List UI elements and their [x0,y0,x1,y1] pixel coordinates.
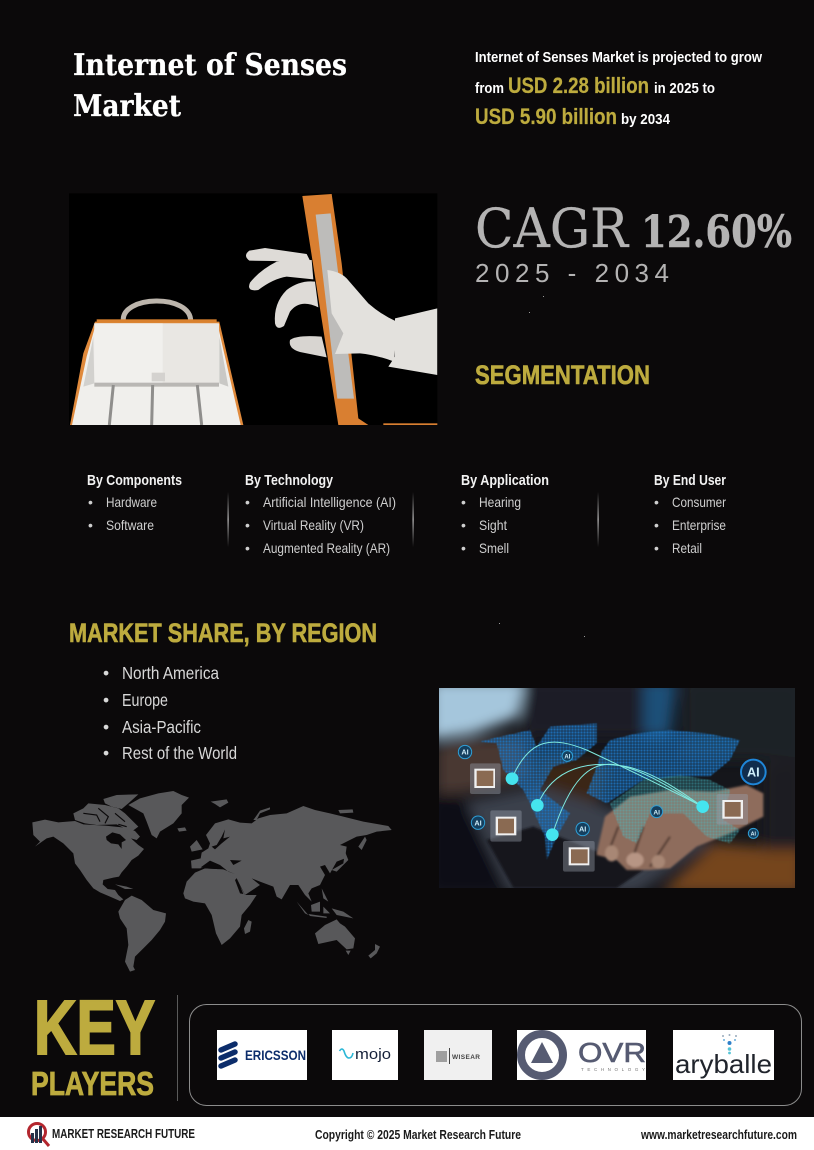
market size summary: from [475,80,504,97]
segment: by components: • [88,494,93,510]
world map [32,791,392,972]
logo: aryballe [673,1030,774,1080]
logo: wisear [424,1030,492,1080]
logo: mojo: mojo [355,1046,391,1063]
photo background tones [439,688,795,888]
region list: • [103,690,109,710]
segment: by technology: By Technology [245,472,334,489]
AI badges: AI [564,754,571,760]
photo: hand reaching through phone to handbag [69,193,438,425]
logo: aryballe: aryballe [675,1049,772,1079]
CAGR: 2025 - 2034 [475,258,669,288]
CAGR [475,197,792,288]
segment: by application: Sight [479,517,507,533]
region list [103,663,237,763]
market size summary: by 2034 [621,111,671,128]
icon: fingers [246,248,327,357]
segment: by technology: • [245,494,250,510]
segment: by application: By Application [461,472,549,489]
region list: Asia-Pacific [122,717,201,737]
AI badges: AI [474,818,482,827]
region list: • [103,663,109,683]
segment: by end user: By End User [654,472,726,489]
segment: by components: By Components [87,472,182,489]
CAGR: CAGR [475,197,629,260]
logo: ericsson: ERICSSON [245,1048,306,1063]
heading: market share by region: MARKET SHARE, BY REGION [69,618,377,648]
logo: wisear: WISEAR [452,1054,480,1061]
dotted map [480,723,740,860]
market size summary: in 2025 to [654,80,715,97]
logo: ericsson [217,1030,307,1080]
logo: mojo [332,1030,398,1080]
market size summary: Internet of Senses Market is projected to grow [475,49,762,66]
key players heading [31,985,155,1102]
segment: by technology: Artificial Intelligence (AI) [263,494,396,510]
region list: North America [122,663,219,683]
segment: by components: • [88,517,93,533]
segment: by application: Hearing [479,494,521,510]
segment: by components [87,472,182,533]
logo: ovr technology [517,1030,646,1080]
logo: ovr technology: TECHNOLOGY [581,1067,645,1072]
region list: • [103,743,109,763]
segment: by application [461,472,549,556]
AI badges [458,745,766,838]
segment: by application: • [461,517,466,533]
photo: hands on laptop with digital world map [439,688,795,888]
stray specks [499,296,585,637]
logo: ovr technology: OVR [578,1037,646,1068]
segment: by application: • [461,540,466,556]
keyboard [487,827,643,888]
segment: by end user [654,472,726,556]
icon: market research future logo [28,1124,49,1146]
title: Market [73,89,181,124]
segment: by end user: • [654,540,659,556]
AI badges: AI [751,832,757,838]
segment: by components: Hardware [106,494,157,510]
segment: by components: Software [106,517,154,533]
region list: • [103,717,109,737]
market size summary: USD 5.90 billion [475,104,617,129]
segment: by end user: • [654,494,659,510]
segment: by technology: • [245,540,250,556]
package tiles [470,763,748,872]
AI badges: AI [747,766,760,780]
AI badges: AI [579,825,586,834]
right hand [597,785,763,870]
segment: by end user: Enterprise [672,517,726,533]
heading: segmentation: SEGMENTATION [475,360,650,390]
title [73,48,347,124]
connection arcs [512,742,703,835]
icon: palm and cuff [327,270,437,375]
region list: Rest of the World [122,743,237,763]
key players panel [190,1004,802,1106]
AI badges: AI [653,809,660,816]
icon: phone [302,194,438,425]
segment: by application: • [461,494,466,510]
segment: by technology: • [245,517,250,533]
segment: by end user: Retail [672,540,702,556]
title: Internet of Senses [73,48,347,83]
segment: by technology: Virtual Reality (VR) [263,517,364,533]
footer [0,1117,814,1150]
segment: by application: Smell [479,540,509,556]
segment: by technology [245,472,396,556]
market size summary: USD 2.28 billion [508,73,649,98]
market size summary [475,49,762,129]
segment: by end user: Consumer [672,494,726,510]
segment: by technology: Augmented Reality (AR) [263,540,390,556]
footer: MARKET RESEARCH FUTURE [52,1126,195,1141]
key players heading: PLAYERS [31,1065,154,1102]
nodes [506,772,709,841]
AI badges: AI [461,748,469,757]
africa, eurasia and oceania [183,799,392,958]
footer: Copyright © 2025 Market Research Future [315,1127,521,1142]
teal dotted overlay [610,775,740,843]
americas and greenland [32,791,189,972]
region list: Europe [122,690,168,710]
key players heading: KEY [34,985,155,1071]
icon: handbag [70,301,243,425]
segment: by end user: • [654,517,659,533]
